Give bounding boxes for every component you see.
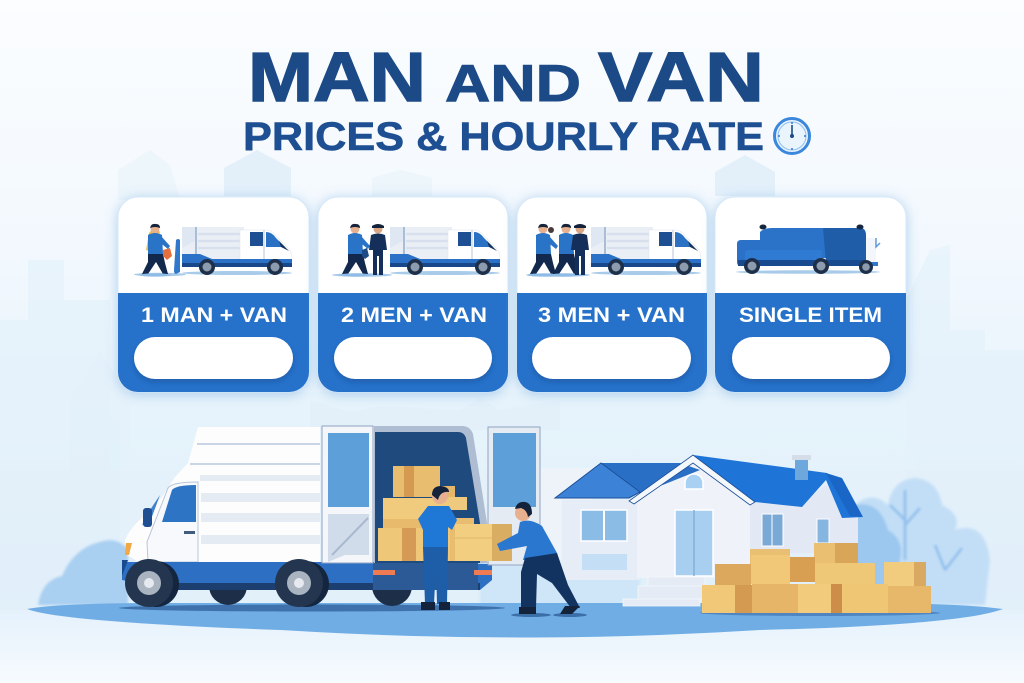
door handle: [184, 531, 195, 534]
price pill (blank): [732, 337, 890, 379]
cab window: [162, 485, 196, 522]
door: [675, 510, 713, 576]
panel: 3 men + van: [517, 197, 707, 392]
label: single item: SINGLE ITEM: [739, 303, 882, 327]
title: [243, 38, 764, 159]
van body: [125, 427, 320, 563]
right door: [488, 427, 540, 565]
panel: single item: [715, 197, 906, 392]
right wing wall: [750, 485, 858, 553]
wheel arches and wheels: [125, 559, 329, 607]
roof: right: [693, 455, 863, 518]
roof: back: [601, 463, 700, 494]
headlight: [125, 543, 132, 555]
left wing wall: [562, 500, 640, 580]
illustration: two movers with van: [332, 224, 500, 277]
roof: left wing: [555, 463, 640, 498]
window right: [762, 514, 783, 546]
ground: [27, 603, 1003, 638]
main van: [122, 426, 540, 607]
illustration: sofa van: [736, 224, 880, 274]
interior: [375, 432, 480, 563]
price pill (blank): [334, 337, 492, 379]
mover: man pushing box: [497, 502, 587, 617]
reflectors: [373, 570, 492, 575]
window arched: [685, 474, 703, 489]
subtitle: PRICES & HOURLY RATE: [243, 115, 764, 159]
roof: main gable edge: [629, 455, 755, 505]
cab door: [147, 482, 198, 562]
pile of boxes: [702, 543, 931, 613]
house: [540, 455, 863, 606]
chimney: [795, 458, 808, 480]
van wheels behind: [209, 567, 247, 605]
window left: [581, 510, 627, 541]
label: 2 men + van: 2 MEN + VAN: [341, 303, 487, 327]
main gable wall: [637, 462, 752, 578]
price pill (blank): [532, 337, 691, 379]
illustration: three movers with van: [526, 224, 701, 277]
structure behind house: [540, 468, 592, 560]
panel: 1 man + van: [118, 197, 309, 392]
title word: AND: AND: [445, 55, 581, 113]
panel: 2 men + van: [318, 197, 508, 392]
stacked boxes in van: [378, 466, 474, 561]
icon: clock: [774, 118, 810, 154]
mirror: [143, 508, 152, 527]
illustration: one mover with van: [134, 224, 292, 277]
window small: [817, 519, 829, 543]
background city silhouette: [0, 150, 1024, 610]
cargo floor panel: [373, 563, 478, 590]
price pill (blank): [134, 337, 293, 379]
carried box: [455, 524, 512, 561]
label: 3 men + van: 3 MEN + VAN: [538, 303, 685, 327]
window lower: [582, 554, 627, 570]
mover: man in van: [418, 486, 457, 610]
skirt: [122, 562, 492, 590]
label: 1 man + van: 1 MAN + VAN: [141, 303, 287, 327]
background bushes and trees: [38, 478, 990, 605]
steps: [623, 577, 705, 606]
title word: MAN: MAN: [248, 38, 426, 116]
body stripes: [190, 444, 320, 464]
title word: VAN: VAN: [598, 38, 764, 116]
left door: [322, 426, 373, 563]
door frame: [374, 426, 487, 563]
